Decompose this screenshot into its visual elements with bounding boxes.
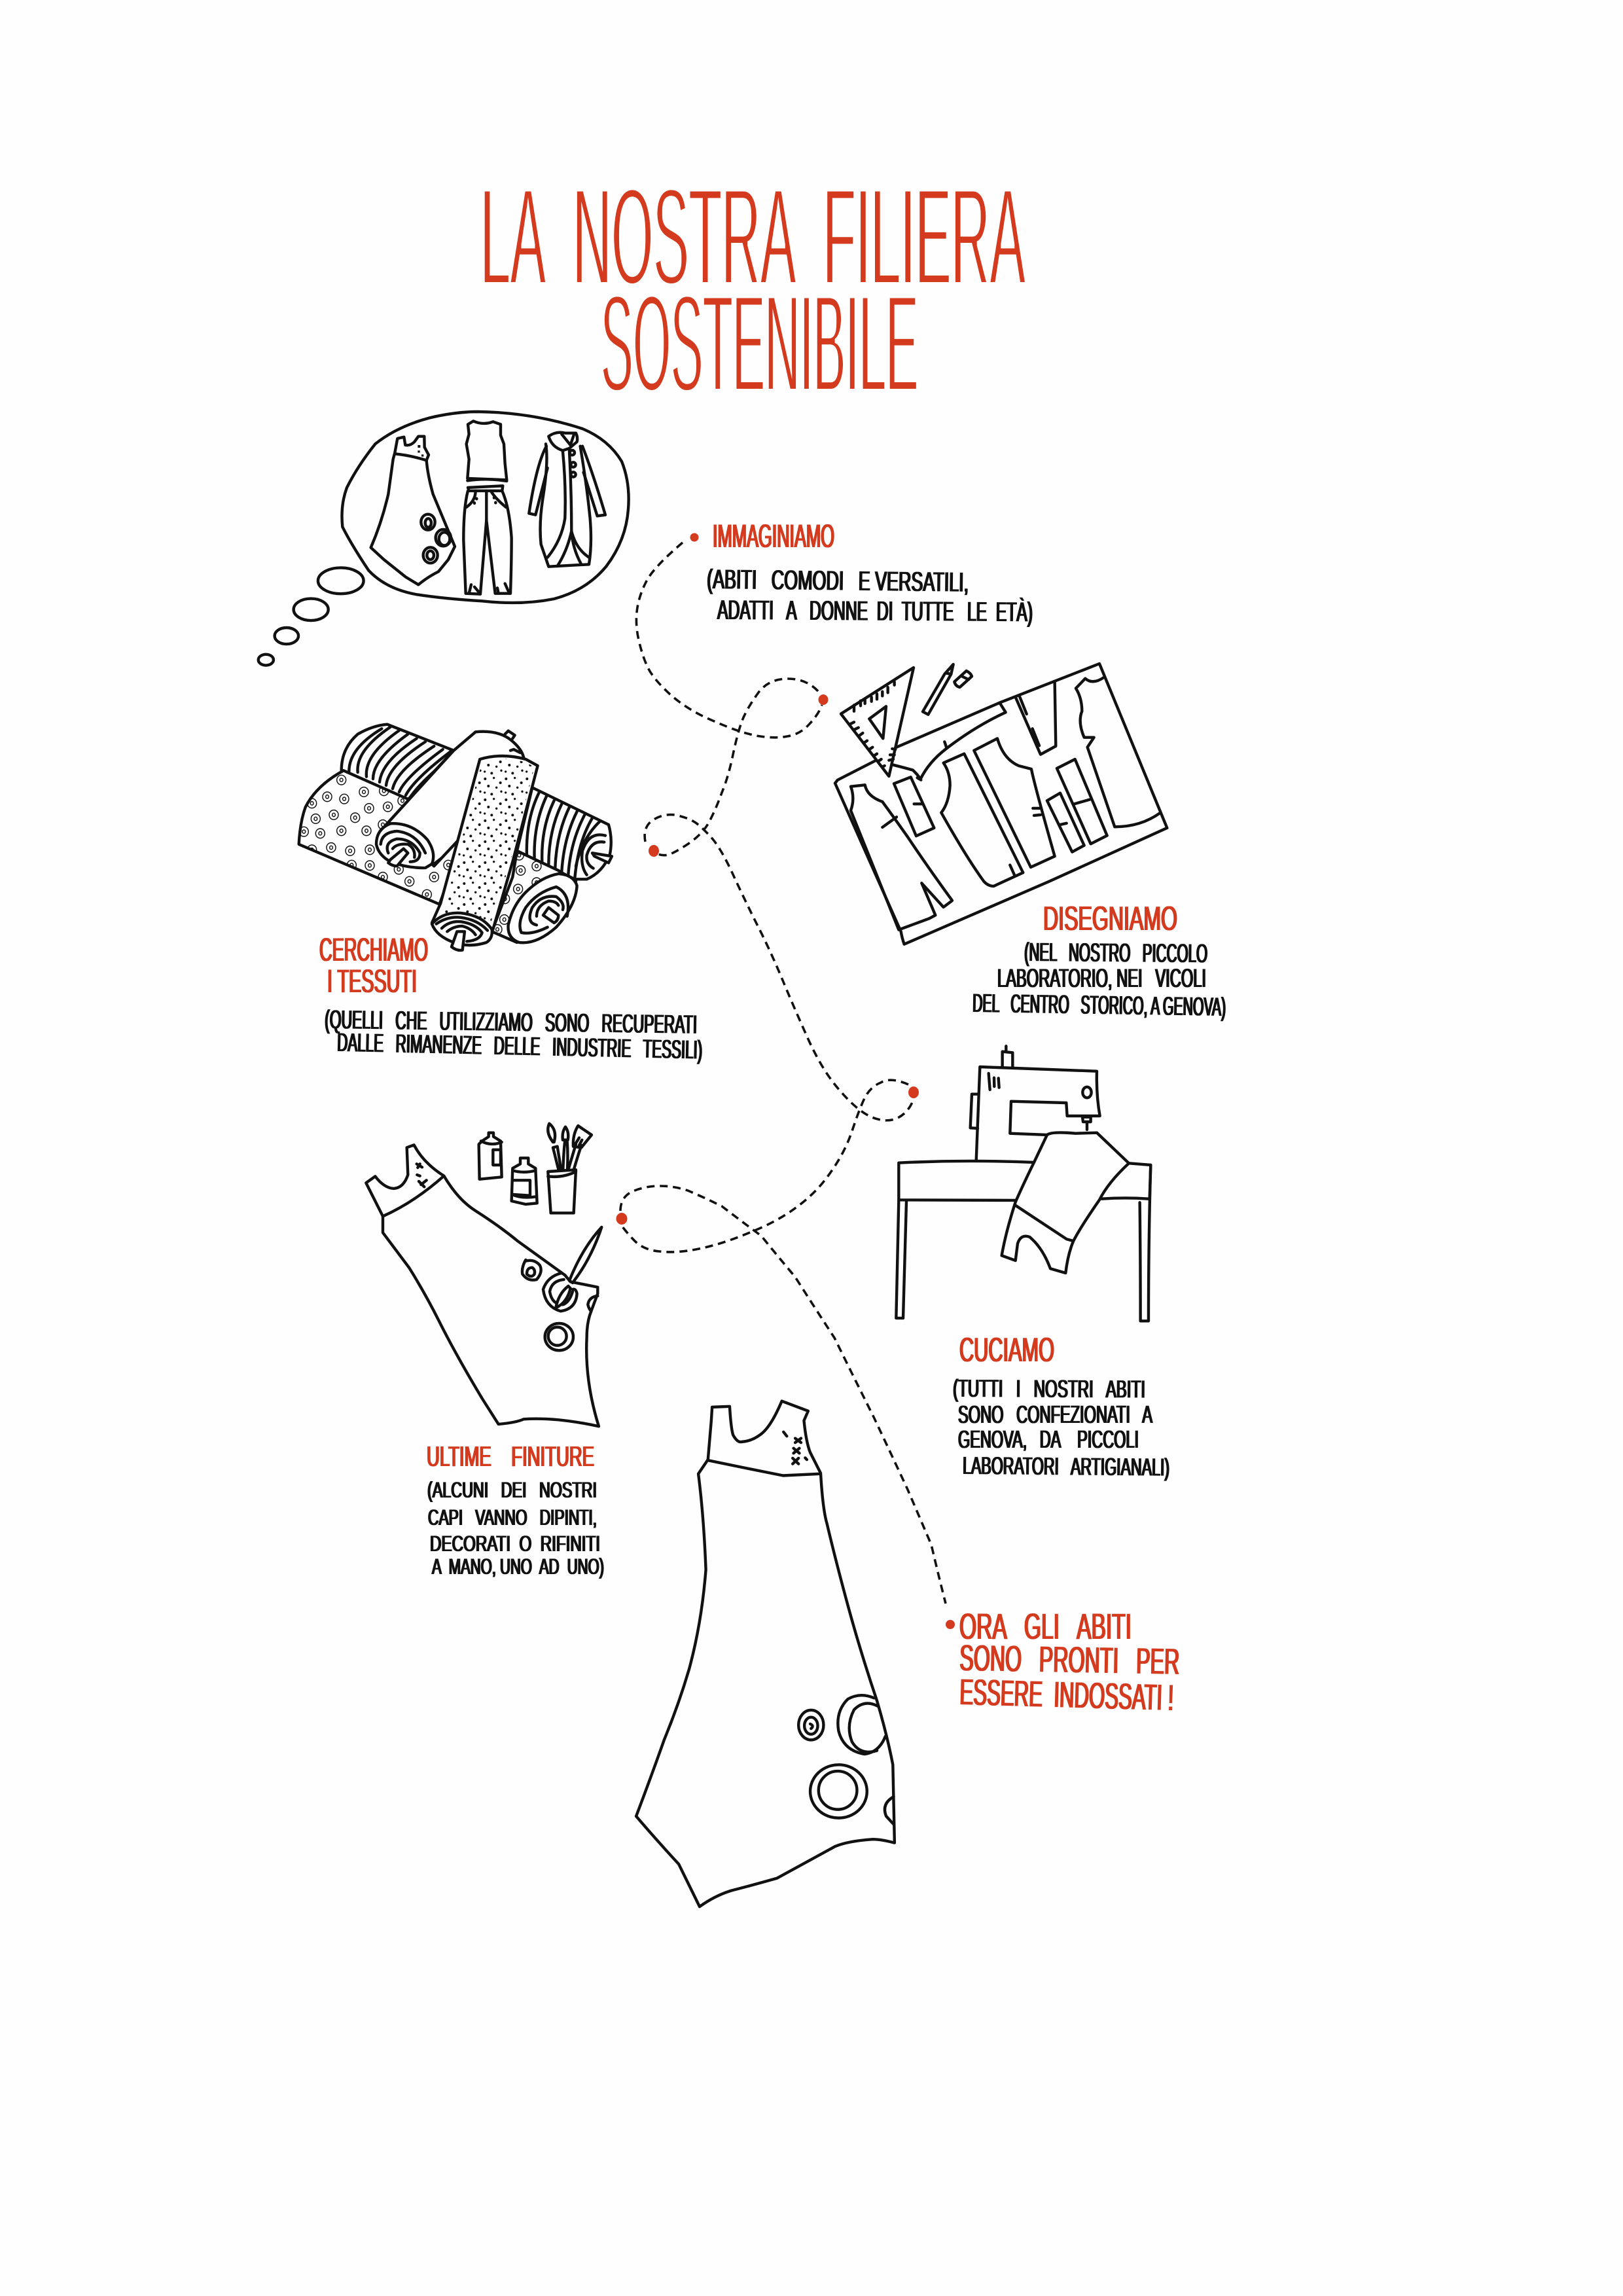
text: immaginiamo note: ADATTI A DONNE DI TUTTE LE ETÀ) (717, 594, 1033, 627)
text: ultime finiture note: DECORATI O RIFINITI (430, 1532, 600, 1556)
text: ultime finiture note: (ALCUNI DEI NOSTRI (427, 1478, 597, 1503)
heading: cerchiamo i tessuti: I TESSUTI (327, 963, 417, 999)
text: cuciamo note: GENOVA, DA PICCOLI (958, 1426, 1139, 1454)
text: immaginiamo note (707, 564, 1033, 627)
text: ultime finiture note: A MANO, UNO AD UNO) (432, 1554, 604, 1579)
text: disegniamo note: DEL CENTRO STORICO, A GENOVA) (972, 989, 1226, 1022)
text: cerchiamo note (325, 1005, 703, 1065)
red waypoint dots (616, 533, 955, 1629)
text: immaginiamo note: (ABITI COMODI E VERSATILI, (707, 564, 969, 598)
small trailing bubbles (259, 567, 364, 666)
bubble with dress, top, trousers and cardigan (342, 412, 629, 603)
panel: abiti pronti (636, 1401, 1180, 1907)
icon: sewing machine on table with fabric (896, 1046, 1150, 1321)
text: disegniamo note: LABORATORIO, NEI VICOLI (997, 964, 1206, 993)
panel: cuciamo (896, 1046, 1169, 1482)
dashed path connecting the steps (620, 543, 946, 1604)
text: cuciamo note: SONO CONFEZIONATI A (958, 1401, 1152, 1429)
text: cuciamo note (953, 1375, 1169, 1482)
panel: disegniamo (835, 664, 1226, 1022)
icon: thought bubble with garments (259, 412, 629, 666)
title (480, 160, 1026, 420)
panel: ultime finiture (366, 1124, 604, 1579)
text: cuciamo note: LABORATORI ARTIGIANALI) (963, 1452, 1169, 1482)
text: SOSTENIBILE (601, 266, 918, 420)
heading: ultime finiture: ULTIME FINITURE (427, 1441, 594, 1473)
icon: fabric rolls (299, 725, 612, 950)
panel: immaginiamo (259, 412, 1033, 666)
icon: dress being painted with paints and brushes (366, 1124, 601, 1426)
text: disegniamo note (972, 938, 1226, 1022)
icon: sewing patterns sheet with ruler and pencil (835, 664, 1167, 944)
panel: cerchiamo i tessuti (299, 725, 703, 1065)
text: ultime finiture note (427, 1478, 604, 1579)
text: final message (959, 1605, 1180, 1718)
text: cuciamo note: (TUTTI I NOSTRI ABITI (953, 1375, 1145, 1404)
heading: immaginiamo: IMMAGINIAMO (713, 518, 834, 554)
heading: cerchiamo i tessuti: CERCHIAMO (319, 931, 428, 968)
text: final message: ORA GLI ABITI (959, 1605, 1132, 1647)
text: cerchiamo note: (QUELLI CHE UTILIZZIAMO SONO RECUPERATI (325, 1005, 697, 1039)
heading: disegniamo: DISEGNIAMO (1043, 900, 1177, 938)
text: final message: ESSERE INDOSSATI ! (959, 1671, 1174, 1718)
heading: cuciamo: CUCIAMO (959, 1331, 1054, 1369)
text: disegniamo note: (NEL NOSTRO PICCOLO (1024, 938, 1207, 968)
text: cerchiamo note: DALLE RIMANENZE DELLE INDUSTRIE TESSILI) (337, 1028, 703, 1065)
text: ultime finiture note: CAPI VANNO DIPINTI, (428, 1505, 597, 1530)
heading: cerchiamo i tessuti (319, 931, 428, 999)
icon: finished dress (636, 1401, 895, 1907)
text: final message: SONO PRONTI PER (959, 1637, 1180, 1682)
